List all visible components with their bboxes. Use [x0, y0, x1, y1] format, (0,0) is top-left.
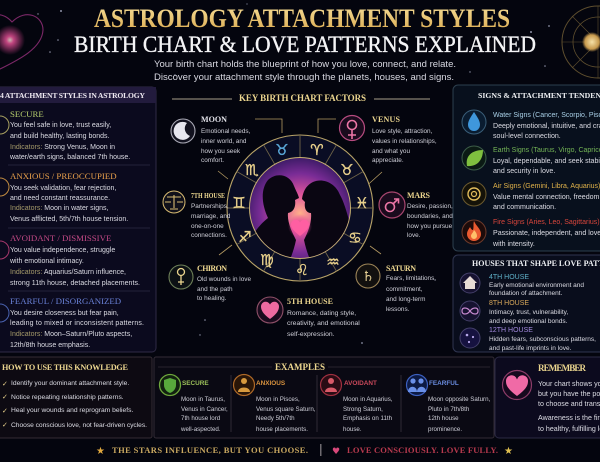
style: avoidant: Indicators: Aquarius/Saturn influence,	[10, 269, 126, 276]
row: air signs: and communication.	[493, 204, 556, 211]
style: anxious: and need constant reassurance.	[10, 195, 110, 202]
factor: venus: VENUS	[372, 115, 401, 124]
factor: venus: and what you	[372, 148, 410, 155]
zodiac glyphs: ♋︎	[348, 229, 362, 247]
title line 2: BIRTH CHART & LOVE PATTERNS EXPLAINED	[74, 32, 536, 58]
checklist: ✓	[2, 393, 8, 401]
factor: saturn: commitment,	[386, 286, 423, 293]
factor: 5th house: Romance, dating style,	[287, 310, 356, 317]
style: fearful: You desire closeness but fear pain,	[10, 310, 119, 317]
checklist: Heal your wounds and reprogram beliefs.	[11, 407, 133, 414]
example: anxious: Venus square Saturn,	[256, 406, 316, 413]
example: avoidant: Emphasis on 11th	[343, 415, 393, 422]
example: anxious: Moon in Pisces,	[256, 396, 300, 403]
row: 4th house: Early emotional environment and	[489, 282, 584, 289]
panel: remember	[495, 357, 600, 438]
style: avoidant: with emotional intimacy.	[9, 258, 84, 265]
row: 4th house: foundation of attachment.	[489, 290, 563, 297]
panel: examples	[154, 357, 494, 438]
factor: 7th house: Partnerships,	[191, 203, 229, 210]
checklist: ✓	[2, 380, 8, 388]
icon: shield	[160, 374, 180, 396]
style: fearful: leading to mixed or inconsistent patterns.	[10, 320, 144, 327]
factor: 7th house: one-on-one	[191, 223, 224, 230]
factor: mars: boundaries, and	[407, 213, 453, 220]
row: air signs	[462, 182, 600, 211]
panel: 4 attachment styles	[0, 87, 156, 352]
factor: moon: how you seek	[201, 148, 241, 155]
panel heading: EXAMPLES	[275, 362, 325, 372]
row: fire signs	[462, 219, 600, 248]
zodiac glyphs: ♈︎	[310, 141, 324, 159]
icon: heart: ♥	[332, 447, 340, 457]
factor: moon: Emotional needs,	[201, 128, 251, 135]
zodiac glyphs: ♌︎	[295, 261, 309, 279]
zodiac wheel	[227, 135, 373, 281]
checklist: ✓	[2, 407, 8, 415]
example: secure: Moon in Taurus,	[181, 396, 225, 403]
factor: 5th house: self-expression.	[287, 331, 335, 338]
row: 12th house	[460, 327, 596, 352]
example: secure: well-aspected.	[180, 426, 221, 433]
row: earth signs	[462, 146, 600, 175]
icon: libra scales	[163, 191, 185, 213]
icon: star: ★	[96, 446, 105, 457]
factor: venus: Love style, attraction,	[372, 128, 433, 135]
factor: moon	[171, 115, 251, 164]
panel heading: REMEMBER	[538, 363, 586, 373]
style: secure: water/earth signs, balanced 7th house.	[9, 154, 130, 161]
icon: chiron key	[169, 265, 193, 289]
panel: signs and attachment tendencies	[453, 85, 600, 251]
style: anxious: Venus afflicted, 5th/7th house tension.	[10, 216, 128, 223]
decoration: glowing heart top left	[0, 15, 43, 72]
example: avoidant: Strong Saturn,	[343, 406, 383, 413]
icon: avoidant person	[320, 374, 342, 396]
style: avoidant: strong 11th house, detached placements.	[10, 280, 140, 287]
factor: moon: comfort.	[201, 157, 224, 164]
factor: moon: MOON	[201, 115, 227, 124]
panel heading: HOW TO USE THIS KNOWLEDGE	[2, 363, 129, 372]
intro text	[154, 59, 456, 82]
style: anxious: ANXIOUS / PREOCCUPIED	[10, 171, 117, 181]
row: 12th house: 12TH HOUSE	[489, 327, 533, 334]
factor: moon: inner world, and	[201, 138, 247, 145]
style: anxious	[0, 171, 128, 223]
wheel spokes	[227, 135, 373, 281]
factor: saturn: lessons.	[386, 306, 410, 313]
row: water signs: soul-level connection.	[493, 133, 561, 140]
factor: venus: appreciate.	[372, 157, 404, 164]
footer banner	[96, 444, 513, 457]
factor: saturn: Fears, limitations,	[386, 275, 436, 282]
example: fearful: 12th house	[428, 415, 459, 422]
style: avoidant	[0, 233, 140, 287]
icon: infinity	[460, 301, 480, 321]
style: secure: SECURE	[10, 109, 44, 119]
factor: chiron: Old wounds in love	[197, 276, 251, 283]
example: anxious: Needy 5th/7th	[256, 415, 295, 422]
zodiac glyphs: ♏︎	[245, 161, 259, 179]
panel: how to use this knowledge	[0, 357, 152, 438]
checklist	[2, 380, 147, 429]
factor: mars	[379, 191, 453, 239]
footer banner: THE STARS INFLUENCE, BUT YOU CHOOSE.	[112, 445, 308, 455]
example: fearful	[406, 374, 491, 433]
factor: mars: MARS	[407, 191, 431, 200]
example: fearful: FEARFUL	[429, 380, 459, 387]
example: fearful: Pluto in 7th/8th	[428, 406, 470, 413]
factor: mars: how you pursue	[407, 223, 453, 230]
factor: chiron: and the path	[197, 286, 233, 293]
factor: 5th house: 5TH HOUSE	[287, 297, 333, 306]
row: air signs: Air Signs (Gemini, Libra, Aquarius)	[493, 183, 600, 190]
example: avoidant: Moon in Aquarius,	[343, 396, 393, 403]
row: 8th house: Intimacy, trust, vulnerability,	[489, 309, 568, 316]
style: secure: Indicators: Strong Venus, Moon in	[10, 144, 115, 151]
intro text: Your birth chart holds the blueprint of how you love, connect, and relate.	[154, 59, 456, 69]
factor: saturn: SATURN	[386, 264, 416, 273]
style: anxious: Indicators: Moon in water signs,	[10, 205, 108, 212]
row: 8th house: and deep emotional bonds.	[489, 318, 568, 325]
example: secure: Venus in Cancer,	[181, 406, 228, 413]
row: 4th house: 4TH HOUSE	[489, 274, 529, 281]
example: anxious	[234, 374, 316, 433]
icon: stars	[460, 328, 480, 348]
icon: saturn: ♄︎	[362, 269, 374, 285]
style: fearful: FEARFUL / DISORGANIZED	[10, 296, 121, 306]
checklist: Choose conscious love, not fear-driven cycles.	[11, 422, 147, 429]
row: 8th house: 8TH HOUSE	[489, 300, 529, 307]
factor: venus	[340, 115, 437, 164]
icon: mars	[379, 192, 405, 218]
heading: key birth chart factors: KEY BIRTH CHART FACTORS	[239, 93, 366, 103]
style: anxious: You seek validation, fear rejection,	[10, 185, 116, 192]
factor: 5th house: creativity, and emotional	[287, 320, 360, 327]
title	[74, 4, 536, 58]
title line 1: ASTROLOGY ATTACHMENT STYLES	[94, 4, 510, 33]
panel heading: 4 ATTACHMENT STYLES IN ASTROLOGY	[0, 91, 146, 100]
factor: venus: values in relationships,	[372, 138, 437, 145]
icon: anxious person	[234, 374, 254, 396]
footer banner: LOVE CONSCIOUSLY. LOVE FULLY.	[347, 445, 498, 455]
example: anxious: house placements.	[256, 426, 308, 433]
icon: star: ★	[504, 446, 513, 457]
icon: leaf	[462, 146, 486, 170]
intro text: Discover your attachment style through the planets, houses, and signs.	[154, 72, 454, 82]
factor: saturn	[356, 264, 436, 313]
style: fearful: Indicators: Moon–Saturn/Pluto aspects,	[10, 331, 132, 338]
example: avoidant	[320, 374, 393, 433]
factor: mars: Desire, passion,	[407, 203, 453, 210]
checklist: ✓	[2, 421, 8, 429]
style: fearful	[0, 296, 144, 349]
style: avoidant: You value independence, struggle	[10, 247, 115, 254]
row: water signs	[462, 110, 600, 140]
zodiac glyphs: ♉︎	[340, 161, 354, 179]
row: earth signs: and security in love.	[493, 168, 555, 175]
zodiac glyphs: ♐︎	[238, 228, 252, 246]
zodiac glyphs: ♍︎	[260, 251, 274, 269]
factor: chiron: CHIRON	[197, 264, 227, 273]
example: avoidant: house.	[343, 426, 362, 433]
style: fearful: 12th/8th house emphasis.	[10, 342, 90, 349]
row: fire signs: Fire Signs (Aries, Leo, Sagittarius)	[493, 219, 600, 226]
row: air signs: Value mental connection, freedom,	[493, 194, 600, 201]
panel: houses that shape love patterns	[453, 255, 600, 352]
row: fire signs: with intensity.	[492, 241, 535, 248]
example: secure	[160, 374, 228, 433]
factor: chiron: to healing.	[197, 295, 227, 302]
icon: fearful people	[406, 374, 428, 396]
zodiac glyphs: ♉︎	[275, 141, 289, 159]
row: fire signs: Passionate, independent, and love	[493, 230, 600, 237]
icon: venus	[340, 116, 364, 140]
icon: air swirl	[462, 182, 486, 206]
icon: heart	[257, 297, 283, 323]
style: avoidant: AVOIDANT / DISMISSIVE	[10, 233, 111, 243]
factor: saturn: and long-term	[386, 296, 425, 303]
checklist: Identify your dominant attachment style.	[11, 380, 129, 387]
couple silhouettes with heart	[256, 175, 349, 258]
style: secure: You feel safe in love, trust easily,	[10, 122, 111, 129]
icon: water drop	[462, 110, 486, 134]
zodiac glyphs	[232, 141, 369, 279]
checklist: Notice repeating relationship patterns.	[11, 394, 124, 401]
zodiac glyphs: ♒︎	[326, 253, 340, 271]
factor: 7th house: 7TH HOUSE	[191, 192, 225, 200]
example: secure: SECURE	[182, 380, 209, 387]
example: avoidant: AVOIDANT	[344, 380, 377, 387]
example: secure: 7th house lord	[181, 415, 221, 422]
zodiac glyphs: ♓︎	[355, 194, 369, 212]
factor: 5th house	[257, 297, 360, 338]
style: secure	[0, 109, 130, 161]
factor: chiron	[169, 264, 251, 302]
icon: heart	[502, 370, 532, 400]
row: 4th house	[460, 273, 584, 297]
row: 12th house: Hidden fears, subconscious patterns,	[489, 336, 596, 343]
factor: 7th house: connections.	[191, 232, 227, 239]
icon: home	[460, 273, 480, 293]
factor: mars: love.	[407, 232, 421, 239]
zodiac glyphs: ♊︎	[232, 194, 246, 212]
factor: 7th house	[163, 191, 231, 239]
icon: moon	[171, 119, 195, 143]
row: 8th house	[460, 300, 568, 325]
decoration: zodiac wheel top right	[562, 6, 600, 78]
factor: 7th house: marriage, and	[191, 213, 231, 220]
icon: flame	[462, 220, 486, 244]
connector lines	[218, 119, 382, 255]
row: 12th house: and past-life imprints in love.	[489, 345, 572, 352]
star field	[37, 3, 550, 344]
example: anxious: ANXIOUS	[256, 380, 286, 387]
style: secure: and build healthy, lasting bonds.	[10, 133, 110, 140]
example: fearful: prominence.	[428, 426, 462, 433]
example: fearful: Moon opposite Saturn,	[428, 396, 491, 403]
